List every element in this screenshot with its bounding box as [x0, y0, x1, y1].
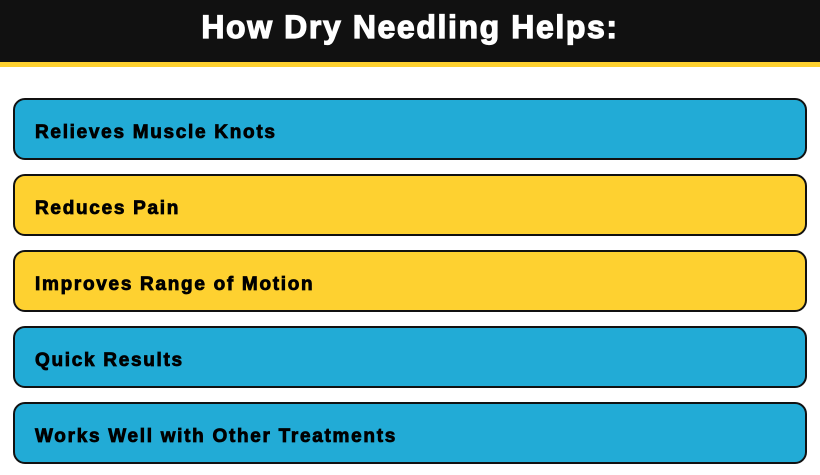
item: relieves muscle knots: Relieves Muscle Knots [35, 122, 277, 143]
item: quick results: Quick Results [35, 350, 184, 371]
item: reduces pain [13, 174, 807, 236]
item: improves range of motion [13, 250, 807, 312]
item: quick results [13, 326, 807, 388]
item: works well with other treatments: Works Well with Other Treatments [35, 426, 397, 447]
item: reduces pain: Reduces Pain [35, 198, 180, 219]
title: How Dry Needling Helps: [201, 9, 619, 45]
item: improves range of motion: Improves Range of Motion [35, 274, 314, 295]
item: works well with other treatments [13, 402, 807, 464]
item: relieves muscle knots [13, 98, 807, 160]
header bar [0, 0, 820, 67]
